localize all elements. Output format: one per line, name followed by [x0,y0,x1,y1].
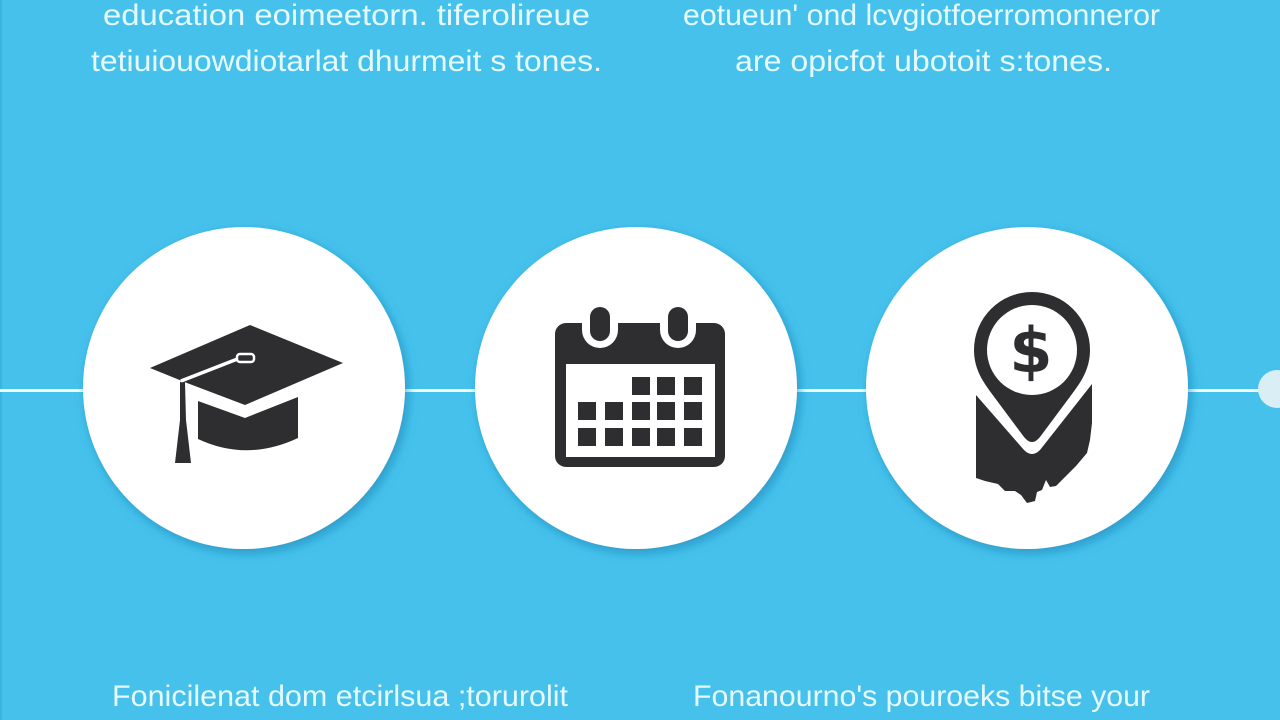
top right text block [683,0,1160,78]
circle: calendar [475,227,797,549]
top right text block: are opicfot ubotoit s:tones. [735,45,1112,78]
icon: graduation cap [150,325,343,463]
bottom left text block: Fonicilenat dom etcirlsua ;torurolit [112,680,569,713]
top left text block: tetiuiouowdiotarlat dhurmeit s tones. [91,45,602,78]
icon: calendar [555,307,725,467]
timeline line [0,389,1265,392]
bottom right text block: Fonanourno's pouroeks bitse your [693,680,1150,713]
icon: state map with dollar pin: $ [1009,314,1053,387]
circle: location cost [866,227,1188,549]
top left text block [91,0,602,78]
circle: education [83,227,405,549]
icon: state map with dollar pin [974,292,1092,503]
timeline end node [1258,370,1280,408]
